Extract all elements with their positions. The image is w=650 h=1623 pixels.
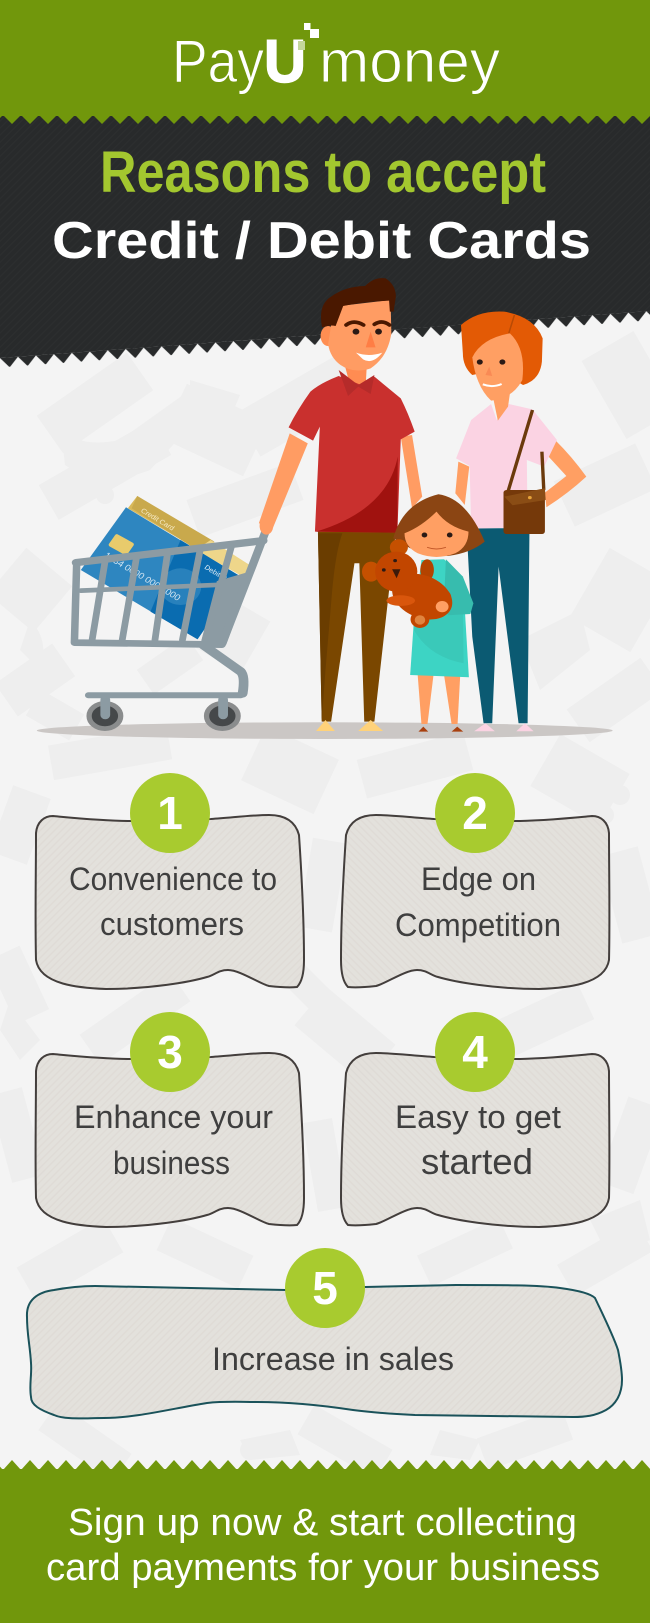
- reason 2 text: Edge on: [421, 861, 536, 897]
- logo: PayUmoney: money: [319, 28, 500, 95]
- reason 2 text: Competition: [395, 907, 561, 943]
- number badge 2: [435, 773, 515, 853]
- credit cards: Credit Card: [139, 507, 176, 532]
- reason 3 text: Enhance your: [74, 1099, 273, 1135]
- call to action: Sign up now & start collecting: [68, 1502, 577, 1544]
- header torn edge: [0, 115, 650, 124]
- illustration: family with shopping cart: [37, 278, 613, 739]
- reason 1 card: [36, 773, 304, 989]
- reason 3 card: [36, 1012, 304, 1227]
- man: [259, 278, 422, 731]
- number badge 3: [130, 1012, 210, 1092]
- reason 3 text: business: [113, 1145, 230, 1181]
- logo: PayUmoney: [172, 23, 500, 95]
- number badge 2: 2: [462, 787, 488, 839]
- footer band: [0, 1469, 650, 1623]
- title: [52, 140, 591, 270]
- dark title band: [0, 116, 650, 358]
- ground shadow: [37, 722, 613, 739]
- reason 2 card: [341, 773, 609, 989]
- number badge 4: [435, 1012, 515, 1092]
- girl with teddy bear: [362, 494, 485, 732]
- shopping cart: [74, 529, 269, 729]
- footer torn edge: [0, 1460, 650, 1470]
- dark band torn edge: [0, 309, 650, 368]
- credit cards: 1234 0000 0000 000: [102, 550, 183, 603]
- number badge 1: [130, 773, 210, 853]
- number badge 1: 1: [157, 787, 183, 839]
- title line 1: Reasons to accept: [100, 140, 546, 205]
- reason 5 text: Increase in sales: [212, 1341, 454, 1377]
- reason 4 text: Easy to get: [395, 1099, 561, 1135]
- reason 4 text: started: [421, 1141, 533, 1182]
- reason 5 card: [27, 1248, 622, 1418]
- reason 1 text: Convenience to: [69, 861, 277, 897]
- reason 1 text: customers: [100, 906, 244, 942]
- number badge 4: 4: [462, 1026, 488, 1078]
- number badge 3: 3: [157, 1026, 183, 1078]
- logo: PayUmoney: Pay: [172, 28, 264, 95]
- logo: PayUmoney: U: [264, 28, 306, 95]
- credit cards: [81, 496, 252, 639]
- title line 2: Credit / Debit Cards: [52, 212, 591, 270]
- number badge 5: 5: [312, 1262, 338, 1314]
- credit cards: Debit Card: [203, 564, 237, 588]
- call to action: card payments for your business: [46, 1547, 600, 1589]
- number badge 5: [285, 1248, 365, 1328]
- woman: [455, 311, 586, 731]
- reason 4 card: [341, 1012, 609, 1227]
- header band: [0, 0, 650, 116]
